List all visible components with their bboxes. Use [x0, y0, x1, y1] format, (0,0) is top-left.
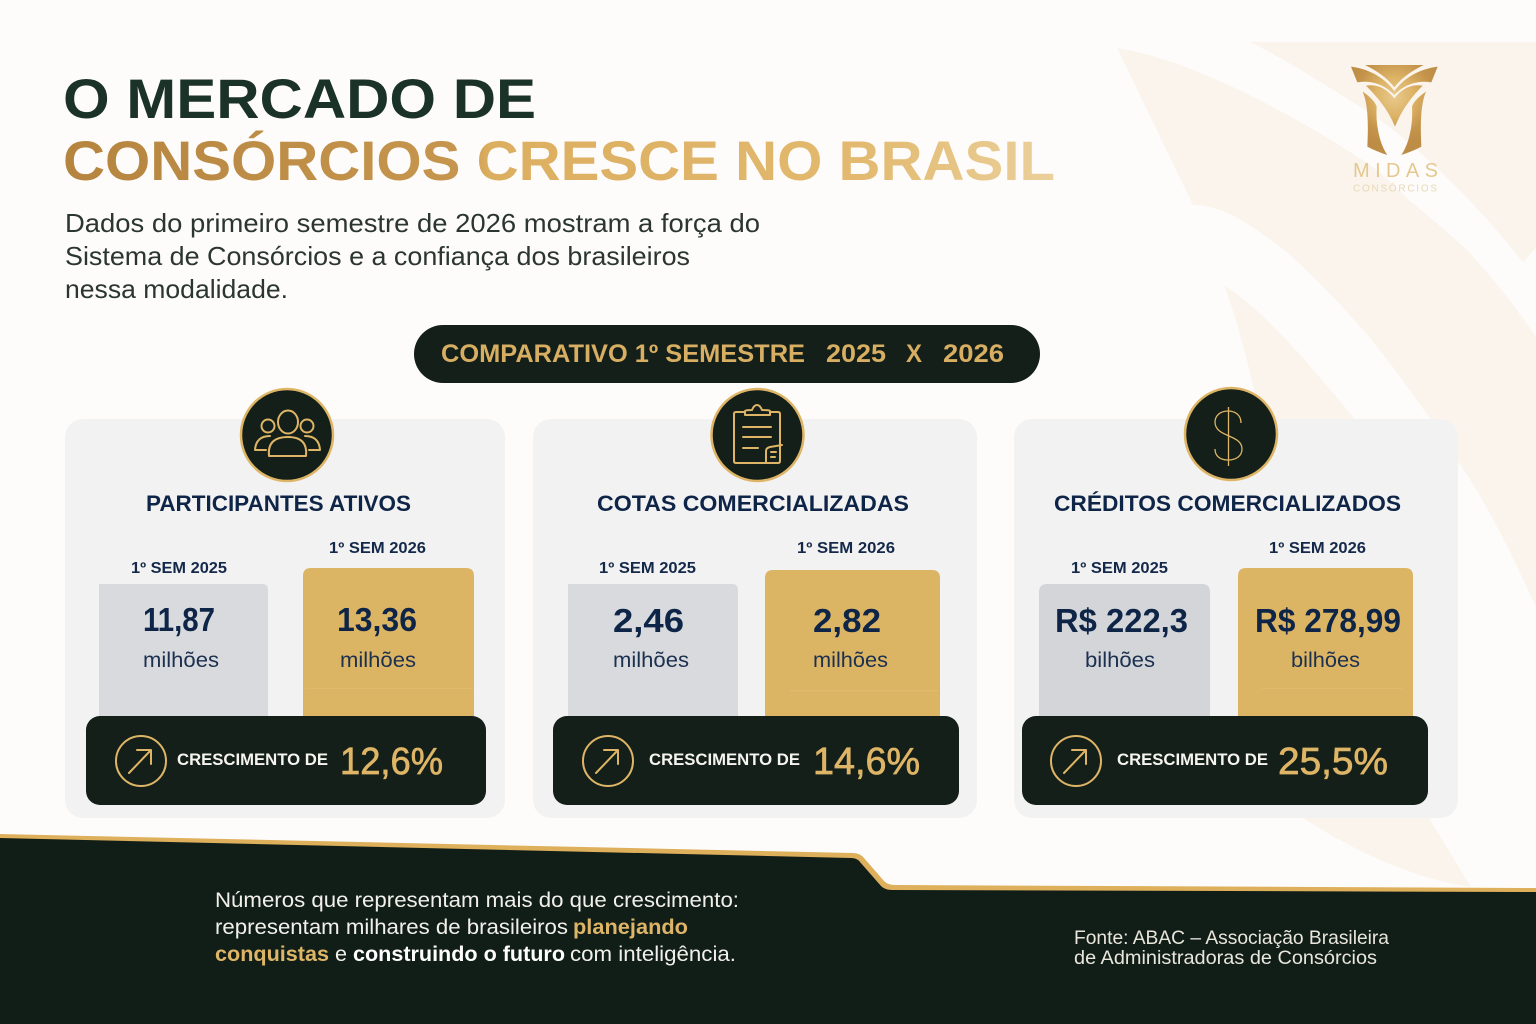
growth banner: CRESCIMENTO DE	[649, 751, 800, 769]
source note	[1074, 927, 1389, 969]
growth banner: CRESCIMENTO DE	[1117, 751, 1268, 769]
bar: 2026: 1º SEM 2026	[329, 540, 426, 557]
footer message: com inteligência.	[570, 943, 736, 966]
bar: 2025	[568, 560, 738, 716]
bar: 2025: milhões	[143, 649, 219, 672]
comparison pill: X	[906, 340, 922, 368]
bar: 2026	[303, 540, 474, 716]
title: CONSÓRCIOS CRESCE NO BRASIL	[63, 129, 1055, 192]
footer message: planejando	[573, 916, 688, 939]
icon: people	[241, 389, 333, 481]
footer message	[215, 889, 739, 966]
subtitle text block: Sistema de Consórcios e a confiança dos brasileiros	[65, 241, 690, 271]
growth banner	[86, 716, 486, 805]
growth banner: 14,6%	[813, 741, 920, 783]
subtitle text block: nessa modalidade.	[65, 274, 288, 304]
footer message: Números que representam mais do que crescimento:	[215, 889, 739, 912]
bar: 2026	[1238, 540, 1413, 716]
heading: COTAS COMERCIALIZADAS	[597, 491, 909, 516]
panel: créditos comercializados	[1014, 388, 1458, 818]
subtitle text block: Dados do primeiro semestre de 2026 mostram a força do	[65, 208, 760, 238]
panel: cotas comercializadas	[533, 389, 977, 818]
subtitle text block	[65, 208, 760, 304]
panel: participantes ativos	[65, 389, 505, 818]
bar: 2026: 1º SEM 2026	[797, 540, 895, 557]
bar: 2026: 13,36	[337, 601, 417, 638]
footer message: conquistas	[215, 943, 329, 966]
bar: 2026	[765, 540, 940, 716]
comparison pill	[414, 325, 1040, 383]
logo: Midas Consórcios: MIDAS	[1353, 160, 1438, 182]
bar: 2025	[99, 560, 268, 716]
footer band	[0, 834, 1536, 1024]
footer message: e	[335, 943, 347, 966]
bar: 2025: 1º SEM 2025	[599, 560, 696, 577]
bar: 2025: 2,46	[613, 602, 684, 639]
bar: 2025	[1039, 560, 1210, 716]
bar: 2025: 1º SEM 2025	[1071, 560, 1168, 577]
bar: 2026: 1º SEM 2026	[1269, 540, 1366, 557]
bar: 2026: milhões	[813, 649, 888, 672]
comparison pill: 2026	[943, 340, 1004, 368]
growth banner	[553, 716, 959, 805]
growth banner	[1022, 716, 1428, 805]
bar: 2026: milhões	[340, 649, 416, 672]
bar: 2025: 1º SEM 2025	[131, 560, 227, 577]
comparison pill: COMPARATIVO 1º SEMESTRE	[441, 340, 805, 368]
source note: de Administradoras de Consórcios	[1074, 947, 1377, 969]
growth banner: 25,5%	[1278, 741, 1388, 783]
bar: 2025: milhões	[613, 649, 689, 672]
title	[63, 67, 1055, 192]
footer message: representam milhares de brasileiros	[215, 916, 568, 939]
heading: CRÉDITOS COMERCIALIZADOS	[1054, 491, 1401, 516]
icon: clipboard	[712, 389, 804, 481]
bar: 2025: bilhões	[1085, 649, 1155, 672]
bar: 2026: R$ 278,99	[1255, 602, 1401, 639]
heading: PARTICIPANTES ATIVOS	[146, 491, 411, 516]
logo: Midas Consórcios	[1351, 65, 1438, 194]
growth banner: CRESCIMENTO DE	[177, 751, 328, 769]
decorative leaf shapes	[1117, 42, 1536, 887]
bar: 2025: R$ 222,3	[1055, 602, 1188, 639]
comparison pill: 2025	[826, 340, 886, 368]
logo: Midas Consórcios: CONSÓRCIOS	[1353, 182, 1437, 194]
growth banner: 12,6%	[340, 741, 443, 783]
bar: 2026: 2,82	[813, 602, 881, 639]
title: O MERCADO DE	[63, 67, 536, 130]
icon: dollar	[1185, 388, 1277, 480]
bar: 2026: bilhões	[1291, 649, 1360, 672]
footer message: construindo o futuro	[353, 943, 565, 966]
source note: Fonte: ABAC – Associação Brasileira	[1074, 927, 1389, 949]
bar: 2025: 11,87	[143, 601, 215, 638]
